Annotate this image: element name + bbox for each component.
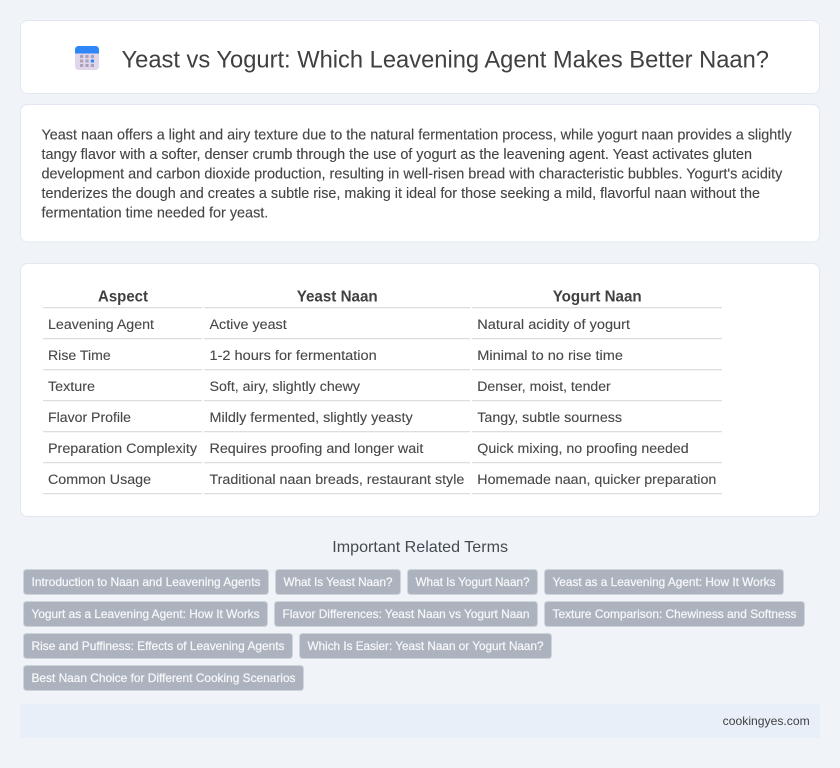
table row: common usage (43, 472, 722, 494)
table row: leavening agent: Active yeast (210, 317, 287, 333)
table row: flavor profile (43, 410, 722, 432)
table header: Yeast Naan (297, 289, 378, 306)
text block: description (42, 127, 792, 221)
tag (24, 666, 304, 690)
tag (24, 634, 292, 658)
text block: description: development and carbon dioxide production, resulting in well-risen bread with characteristic bubbles. Yogurt's acidity (42, 166, 783, 182)
title: Yeast vs Yogurt: Which Leavening Agent Makes Better Naan? (122, 46, 769, 74)
footer bar (20, 704, 820, 738)
tag: Rise and Puffiness: Effects of Leavening Agents (32, 639, 284, 653)
table row: texture: Soft, airy, slightly chewy (210, 379, 361, 395)
text block: description: tenderizes the dough and creates a subtle rise, making it ideal for those seeking a mild, flavorful naan without the (42, 186, 760, 202)
tag: Texture Comparison: Chewiness and Softness (552, 607, 796, 621)
table row: rise time (43, 348, 722, 370)
tag (300, 634, 552, 658)
tag: Yeast as a Leavening Agent: How It Works (552, 575, 776, 589)
tag: Introduction to Naan and Leavening Agents (32, 575, 260, 589)
tag: Yogurt as a Leavening Agent: How It Works (32, 607, 260, 621)
table row: preparation complexity: Quick mixing, no proofing needed (477, 441, 689, 457)
table header (43, 289, 722, 308)
tag list: related terms (24, 570, 804, 690)
footer source text: cookingyes.com (723, 714, 810, 728)
panel: introduction (20, 104, 820, 242)
panel: header card (20, 20, 820, 94)
table header: Aspect (98, 289, 149, 306)
panel: comparison table (20, 264, 820, 516)
icon: calendar (75, 46, 99, 70)
table row: rise time: Rise Time (48, 348, 111, 364)
table row: flavor profile: Tangy, subtle sourness (477, 410, 622, 426)
tag (24, 570, 268, 594)
table row: leavening agent (43, 317, 722, 339)
table row: texture (43, 379, 722, 401)
text block: description: Yeast naan offers a light and airy texture due to the natural fermentation process, while yogurt naan provides a slightly (42, 127, 792, 143)
table row: common usage: Homemade naan, quicker preparation (477, 472, 716, 488)
tag: What Is Yogurt Naan? (416, 575, 530, 589)
table row: preparation complexity (43, 441, 722, 463)
table row: texture: Denser, moist, tender (477, 379, 611, 395)
tag: Flavor Differences: Yeast Naan vs Yogurt Naan (282, 607, 530, 621)
tag: Which Is Easier: Yeast Naan or Yogurt Naan? (308, 639, 544, 653)
table row: preparation complexity: Requires proofing and longer wait (210, 441, 423, 457)
tag (544, 570, 784, 594)
tag (276, 570, 400, 594)
table row: common usage: Common Usage (48, 472, 151, 488)
tag (274, 602, 538, 626)
heading: related terms: Important Related Terms (332, 539, 508, 556)
table row: flavor profile: Mildly fermented, slightly yeasty (210, 410, 414, 426)
table row: leavening agent: Leavening Agent (48, 317, 154, 333)
table row: leavening agent: Natural acidity of yogurt (477, 317, 630, 333)
table row: texture: Texture (48, 379, 95, 395)
table header: Yogurt Naan (553, 289, 642, 306)
tag (544, 602, 804, 626)
tag (24, 602, 268, 626)
table row: rise time: Minimal to no rise time (477, 348, 623, 364)
tag: Best Naan Choice for Different Cooking Scenarios (32, 671, 296, 685)
tag: What Is Yeast Naan? (284, 575, 393, 589)
table row: common usage: Traditional naan breads, restaurant style (210, 472, 464, 488)
table row: rise time: 1-2 hours for fermentation (210, 348, 377, 364)
table row: preparation complexity: Preparation Complexity (48, 441, 198, 457)
text block: description: fermentation time needed for yeast. (42, 205, 268, 221)
text block: description: tangy flavor with a softer, denser crumb through the use of yogurt as the leavening agent. Yeast activates gluten (42, 147, 752, 163)
tag (408, 570, 538, 594)
table row: flavor profile: Flavor Profile (48, 410, 131, 426)
